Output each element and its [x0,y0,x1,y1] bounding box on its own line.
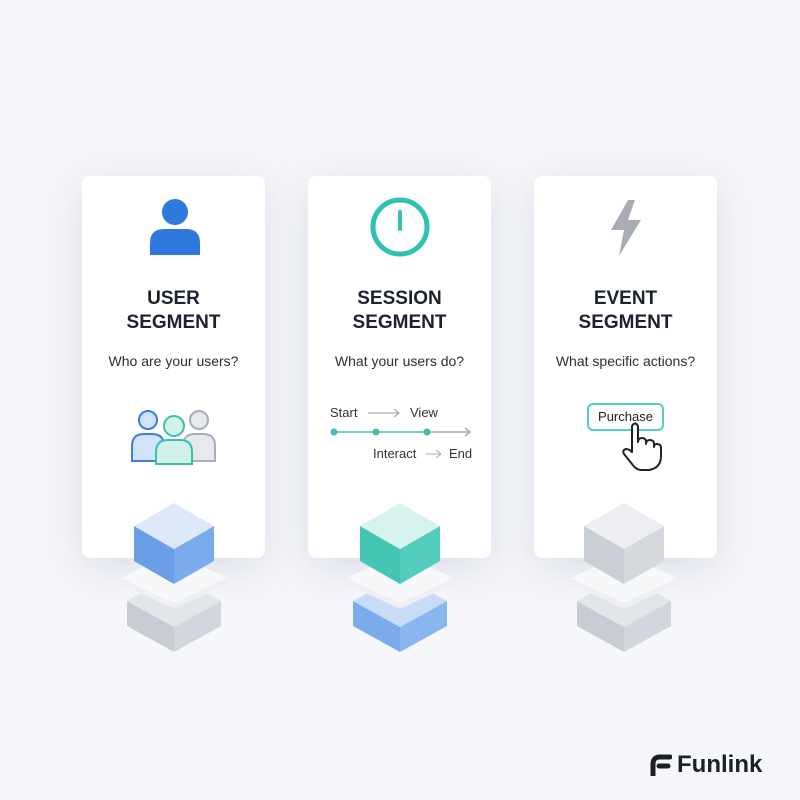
flow diagram [330,405,472,461]
heading: USER [147,288,200,309]
cube stack: user [121,503,227,652]
panel: event segment: What specific actions? [556,353,695,369]
panel: session segment: What your users do? [335,353,464,369]
logo: Funlink: Funlink [677,751,762,778]
cube stack: event [571,503,677,652]
flow diagram: End [449,446,472,461]
heading: SEGMENT [127,312,220,333]
panel: session segment: SEGMENT [353,312,446,333]
icon: hand cursor [622,422,662,471]
panel: user segment [82,176,265,558]
panel: event segment: EVENT [594,288,657,309]
icon: clock [370,198,430,256]
icon: user [150,199,200,255]
flow diagram: Start [330,405,357,420]
button: purchase: Purchase [598,409,653,424]
text: Who are your users? [109,353,238,369]
panel: event segment: SEGMENT [579,312,672,333]
flow diagram: Interact [373,446,416,461]
heading [127,288,220,333]
button: purchase [587,403,664,431]
flow diagram: View [410,405,438,420]
panel: session segment: SESSION [357,288,442,309]
icon: lightning [611,200,641,256]
panel: session segment [308,176,491,558]
panel: event segment [534,176,717,558]
cube stack: session [347,503,453,652]
icon: user group [131,410,216,465]
